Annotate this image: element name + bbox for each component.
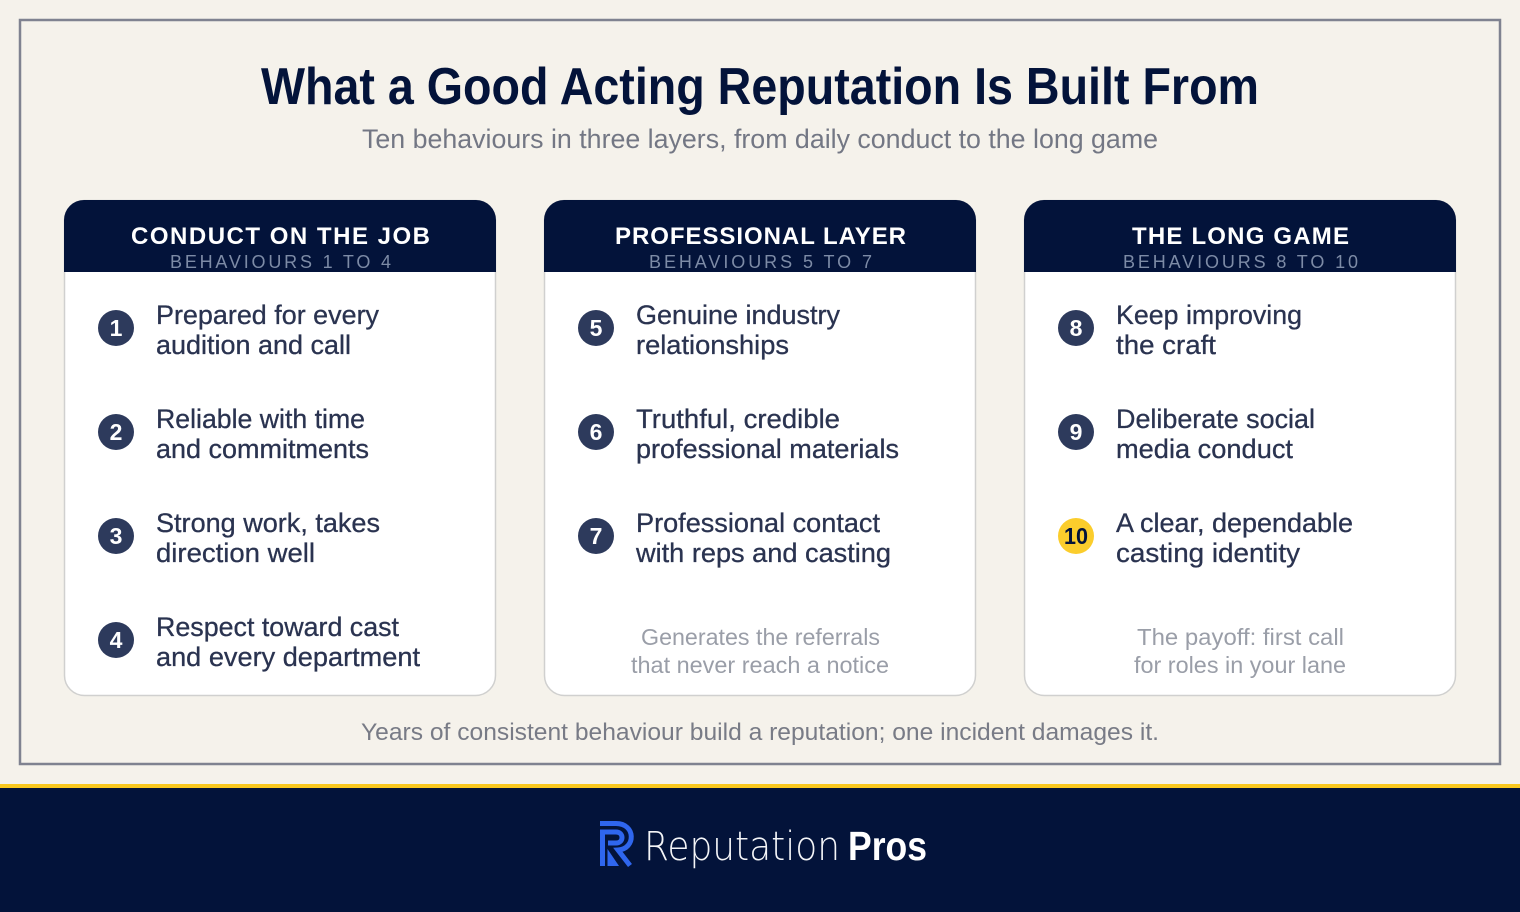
item 7: 7 bbox=[590, 523, 602, 549]
logo bbox=[600, 823, 927, 870]
item 5 bbox=[578, 300, 840, 360]
item 1 bbox=[98, 300, 379, 360]
panel note: that never reach a notice bbox=[631, 652, 889, 678]
panel header bbox=[64, 200, 496, 272]
footer band bbox=[0, 784, 1520, 912]
item 1: Prepared for every bbox=[156, 300, 379, 330]
outer frame bbox=[20, 20, 1500, 764]
item 4: 4 bbox=[110, 627, 123, 653]
item 8 bbox=[1058, 300, 1302, 360]
item 9: media conduct bbox=[1116, 434, 1293, 464]
panel: conduct on the job bbox=[64, 200, 496, 696]
item 2: 2 bbox=[110, 419, 122, 445]
item 9: Deliberate social bbox=[1116, 404, 1315, 434]
item 2 bbox=[98, 404, 369, 464]
panel header bbox=[544, 200, 976, 272]
item 10: casting identity bbox=[1116, 538, 1301, 568]
item 7: Professional contact bbox=[636, 508, 880, 538]
panel header: BEHAVIOURS 5 TO 7 bbox=[649, 252, 872, 272]
item 1: audition and call bbox=[156, 330, 351, 360]
panel header bbox=[1024, 200, 1456, 272]
panel note: Generates the referrals bbox=[641, 624, 880, 650]
item 5: Genuine industry bbox=[636, 300, 840, 330]
item 2: Reliable with time bbox=[156, 404, 365, 434]
item 6 bbox=[578, 404, 899, 464]
item 3 bbox=[98, 508, 380, 568]
icon: R mark bbox=[600, 824, 631, 866]
item 6: Truthful, credible bbox=[636, 404, 840, 434]
logo: Reputation bbox=[644, 824, 840, 870]
item 2: and commitments bbox=[156, 434, 369, 464]
closing note: Years of consistent behaviour build a reputation; one incident damages it. bbox=[361, 719, 1159, 746]
logo: Pros bbox=[848, 823, 927, 869]
item 7 bbox=[578, 508, 891, 568]
panel note: The payoff: first call bbox=[1137, 624, 1344, 650]
item 5: relationships bbox=[636, 330, 789, 360]
panel note bbox=[631, 624, 889, 678]
item 9: 9 bbox=[1070, 419, 1082, 445]
item 1: 1 bbox=[110, 315, 123, 341]
title: What a Good Acting Reputation Is Built From bbox=[261, 58, 1259, 116]
panel header: BEHAVIOURS 1 TO 4 bbox=[170, 252, 391, 272]
item 8: Keep improving bbox=[1116, 300, 1302, 330]
panel header: CONDUCT ON THE JOB bbox=[131, 223, 430, 250]
item 8: the craft bbox=[1116, 330, 1217, 360]
panel header: PROFESSIONAL LAYER bbox=[615, 223, 906, 250]
item 5: 5 bbox=[590, 315, 603, 341]
item 3: 3 bbox=[110, 523, 122, 549]
panel header: THE LONG GAME bbox=[1132, 223, 1349, 250]
item 7: with reps and casting bbox=[635, 538, 891, 568]
item 4: and every department bbox=[156, 642, 420, 672]
panel: the long game bbox=[1024, 200, 1456, 696]
item 8: 8 bbox=[1070, 315, 1083, 341]
item 10: A clear, dependable bbox=[1116, 508, 1353, 538]
item 6: professional materials bbox=[636, 434, 899, 464]
subtitle: Ten behaviours in three layers, from daily conduct to the long game bbox=[362, 124, 1158, 154]
panel header: BEHAVIOURS 8 TO 10 bbox=[1123, 252, 1358, 272]
panel note bbox=[1134, 624, 1346, 678]
panel note: for roles in your lane bbox=[1134, 652, 1346, 678]
item 4: Respect toward cast bbox=[156, 612, 399, 642]
panel: professional layer bbox=[544, 200, 976, 696]
item 4 bbox=[98, 612, 420, 672]
item 10: 10 bbox=[1064, 523, 1088, 549]
item 10 bbox=[1058, 508, 1353, 568]
item 3: direction well bbox=[156, 538, 315, 568]
item 3: Strong work, takes bbox=[156, 508, 380, 538]
item 6: 6 bbox=[590, 419, 602, 445]
item 9 bbox=[1058, 404, 1315, 464]
